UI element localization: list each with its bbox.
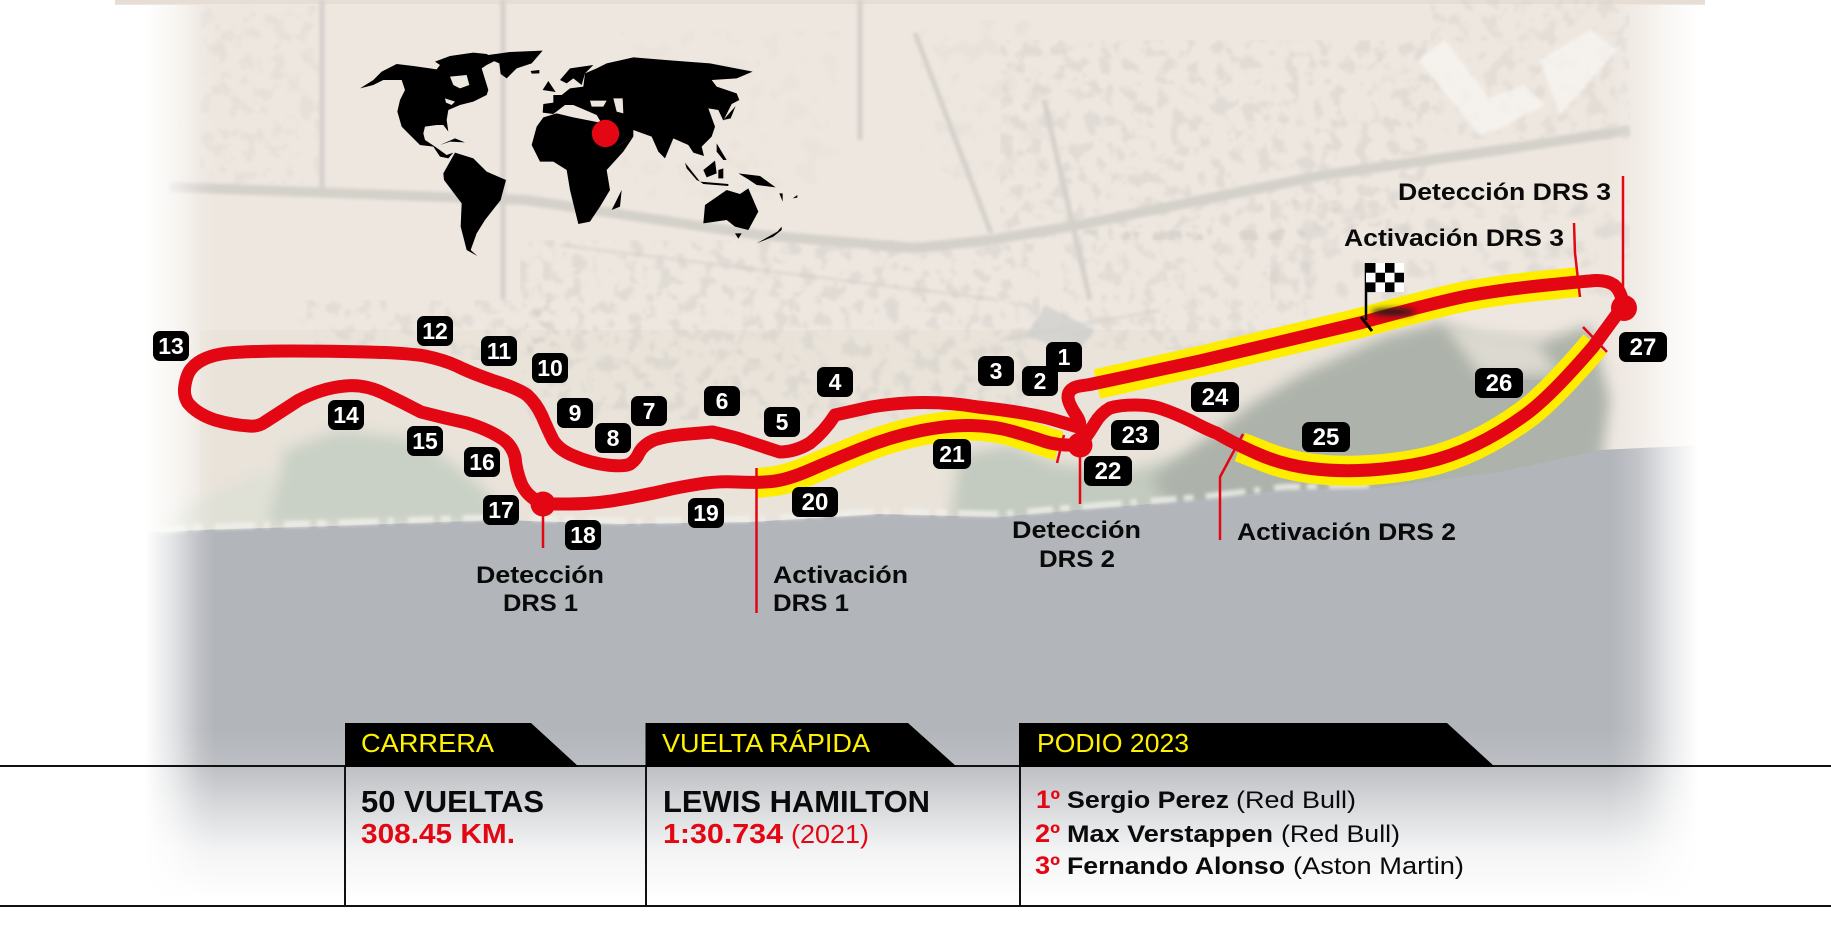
- turn 8: [595, 423, 631, 453]
- table rules: [0, 766, 1831, 906]
- turn 18: 18: [570, 522, 596, 548]
- label: Detección DRS 1: [476, 562, 604, 617]
- label: Activación DRS 1: [773, 562, 908, 617]
- turn 13: [153, 331, 189, 361]
- podium second: 2º: [1035, 820, 1060, 848]
- turn 14: [328, 400, 364, 430]
- label: Activación DRS 2: Activación DRS 2: [1237, 519, 1456, 546]
- DRS labels: [476, 179, 1611, 617]
- fastest time: 1:30.734: [663, 818, 783, 849]
- podium second: [1035, 820, 1400, 848]
- tab: podio: [1019, 723, 1495, 767]
- podium first: [1036, 786, 1356, 814]
- turn 19: [688, 498, 724, 528]
- turn 15: [407, 426, 443, 456]
- label: Detección DRS 1: Detección: [476, 562, 604, 589]
- podium third: 3º: [1035, 852, 1060, 880]
- turn 19: 19: [693, 500, 719, 526]
- turn 24: [1191, 382, 1239, 412]
- turn 3: [978, 356, 1014, 386]
- turn 12: [417, 316, 453, 346]
- panel: carrera: [345, 723, 579, 849]
- label: Detección DRS 2: Detección: [1012, 517, 1141, 544]
- race laps: 50 VUELTAS: [361, 784, 544, 819]
- turn 15: 15: [412, 428, 438, 454]
- turn 9: [557, 398, 593, 428]
- fastest time: [663, 818, 869, 849]
- label: Detección DRS 2: [1012, 517, 1141, 573]
- turn 23: [1111, 420, 1159, 450]
- podium second: Max Verstappen: [1067, 821, 1273, 848]
- turn 4: 4: [829, 369, 842, 395]
- turn 10: 10: [537, 355, 563, 381]
- turn 26: 26: [1486, 370, 1512, 397]
- tab: carrera: CARRERA: [361, 730, 494, 758]
- turn 5: [764, 407, 800, 437]
- DRS zone 2: [1240, 344, 1595, 471]
- podium third: (Aston Martin): [1293, 853, 1464, 880]
- turn 18: [565, 520, 601, 550]
- turn 10: [532, 353, 568, 383]
- panel: podio: [1019, 723, 1495, 880]
- tab: carrera: [345, 723, 579, 767]
- turn 3: 3: [990, 358, 1002, 384]
- race distance: 308.45 KM.: [361, 818, 515, 849]
- turn 6: [704, 386, 740, 416]
- tab: vuelta rapida: [646, 723, 957, 767]
- fastest time: (2021): [791, 819, 869, 849]
- turn 13: 13: [158, 333, 184, 359]
- turn 22: 22: [1095, 458, 1121, 485]
- icon: checkered start flag: [1361, 263, 1415, 331]
- turn 16: 16: [469, 449, 495, 475]
- turn 25: 25: [1313, 424, 1339, 451]
- panel: vuelta rapida: [646, 723, 957, 849]
- turn 1: 1: [1058, 344, 1071, 370]
- turn 25: [1302, 422, 1350, 452]
- stats table: [0, 723, 1831, 906]
- turn 21: 21: [939, 441, 965, 467]
- turn 8: 8: [607, 425, 620, 451]
- turn 4: [817, 367, 853, 397]
- turn 16: [464, 447, 500, 477]
- DRS zone 1: [756, 425, 1059, 483]
- tab: podio: PODIO 2023: [1037, 730, 1189, 758]
- label: Activación DRS 3: Activación DRS 3: [1344, 225, 1564, 252]
- turn 27: 27: [1630, 334, 1656, 361]
- turn 24: 24: [1202, 384, 1229, 411]
- turn 5: 5: [776, 409, 789, 435]
- turn 7: [631, 396, 667, 426]
- label: Detección DRS 3: Detección DRS 3: [1398, 179, 1611, 206]
- turn 20: 20: [802, 489, 828, 516]
- turn 22: [1084, 456, 1132, 486]
- turn 9: 9: [569, 400, 581, 426]
- label: Detección DRS 1: DRS 1: [503, 590, 578, 617]
- turn 7: 7: [643, 398, 655, 424]
- red circuit line: [184, 280, 1623, 504]
- podium third: Fernando Alonso: [1067, 853, 1285, 880]
- turn 14: 14: [333, 402, 359, 428]
- world map locator: [360, 51, 797, 256]
- turn 21: [933, 439, 971, 469]
- detection points: [530, 295, 1637, 516]
- podium first: (Red Bull): [1236, 787, 1356, 814]
- DRS zone 3: [1097, 282, 1579, 384]
- turn 2: [1022, 366, 1058, 396]
- turn 26: [1475, 368, 1523, 398]
- fastest driver: LEWIS HAMILTON: [663, 784, 930, 819]
- turn 17: 17: [488, 497, 514, 523]
- turn 6: 6: [716, 388, 728, 414]
- turn 27: [1619, 332, 1667, 362]
- turn 17: [483, 495, 519, 525]
- circuit track: [184, 176, 1637, 613]
- turn 2: 2: [1034, 368, 1046, 394]
- DRS marker lines: [543, 176, 1623, 613]
- podium first: 1º: [1036, 786, 1060, 814]
- turn 23: 23: [1122, 422, 1148, 449]
- podium second: (Red Bull): [1281, 821, 1400, 848]
- label: Activación DRS 1: DRS 1: [773, 590, 849, 617]
- podium third: [1035, 852, 1464, 880]
- turn 12: 12: [422, 318, 448, 344]
- turn 11: [481, 336, 517, 366]
- label: Activación DRS 1: Activación: [773, 562, 908, 589]
- turn 1: [1046, 342, 1082, 372]
- label: Detección DRS 2: DRS 2: [1039, 546, 1115, 573]
- tab: vuelta rapida: VUELTA RÁPIDA: [662, 729, 870, 758]
- location marker: [592, 120, 619, 147]
- corner number labels: [153, 316, 1667, 550]
- turn 11: 11: [487, 338, 511, 364]
- turn 20: [792, 487, 838, 517]
- world map continents: [360, 51, 797, 256]
- podium first: Sergio Perez: [1067, 787, 1229, 814]
